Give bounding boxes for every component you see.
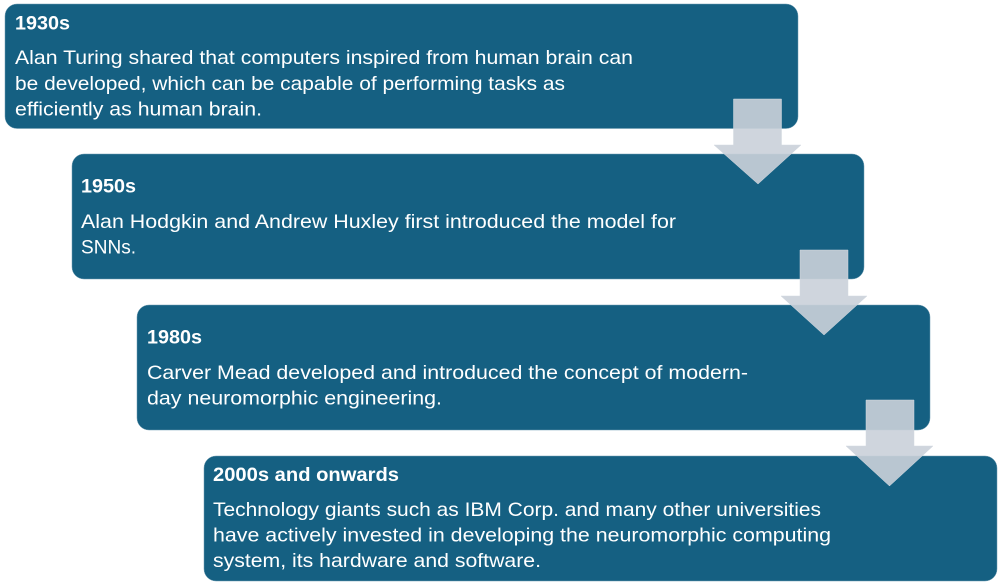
heading: 2000s and onwards: 2000s and onwards — [213, 465, 399, 486]
arrow: 1950s to 1980s — [781, 250, 867, 335]
text block: 2000s description: system, its hardware and software. — [213, 550, 541, 572]
text block: 1930s description: efficiently as human brain. — [15, 98, 262, 120]
text block: 1980s description: Carver Mead developed and introduced the concept of modern- — [147, 362, 748, 384]
text block: 1930s description: Alan Turing shared that computers inspired from human brain can — [15, 47, 633, 69]
text block: 1950s description: Alan Hodgkin and Andrew Huxley first introduced the model for — [81, 211, 677, 233]
text block: 2000s description: have actively invested in developing the neuromorphic computing — [213, 524, 831, 546]
text block: 1930s description: be developed, which can be capable of performing tasks as — [15, 73, 565, 95]
text block: 2000s description — [213, 499, 831, 572]
arrow: 1980s to 2000s — [846, 400, 933, 486]
panel: 1980s — [137, 305, 930, 430]
heading: 1950s: 1950s — [81, 176, 136, 198]
arrow: 1930s to 1950s — [714, 99, 801, 184]
heading: 1930s: 1930s — [15, 14, 70, 34]
text block: 1930s description — [15, 47, 633, 120]
text block: 1980s description: day neuromorphic engineering. — [147, 388, 442, 410]
text block: 1950s description: SNNs. — [81, 236, 136, 258]
text block: 1950s description — [81, 211, 677, 258]
panel: 1930s — [5, 4, 798, 128]
panel: 2000s and onwards — [204, 456, 997, 581]
panel: 1950s — [72, 154, 864, 279]
text block: 1980s description — [147, 362, 748, 410]
text block: 2000s description: Technology giants such as IBM Corp. and many other universities — [213, 499, 821, 521]
heading: 1980s: 1980s — [147, 328, 202, 348]
